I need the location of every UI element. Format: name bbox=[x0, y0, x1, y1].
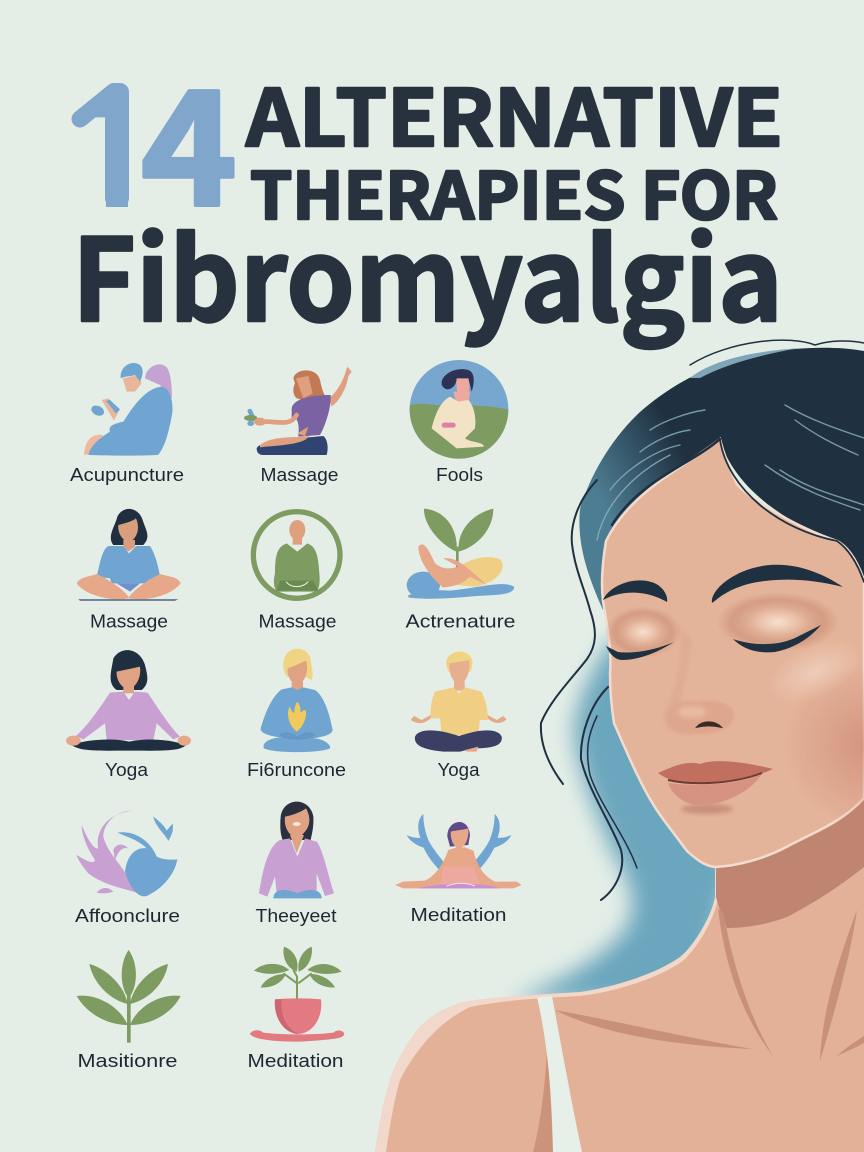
label: meditation bottom: Meditation bbox=[248, 1050, 344, 1071]
icon: acupuncture bbox=[84, 363, 172, 456]
icon: woman in circle bbox=[410, 360, 508, 459]
label: masitionre: Masitionre bbox=[78, 1050, 178, 1071]
hair strands bbox=[541, 340, 864, 900]
lip shadow bbox=[681, 804, 733, 814]
woman portrait bbox=[375, 340, 864, 1152]
top strap bbox=[537, 996, 582, 1152]
neck and shoulders bbox=[375, 798, 864, 1152]
arm shadow beside strap bbox=[533, 1050, 553, 1152]
row 1 icons (drawn at 3x, scaled down) bbox=[77, 358, 514, 601]
label: massage: Massage bbox=[260, 464, 338, 485]
left closed eye bbox=[606, 642, 674, 660]
label: acupuncture: Acupuncture bbox=[70, 464, 184, 485]
nose shading bbox=[663, 622, 692, 735]
icon: meditation with antlers bbox=[395, 814, 522, 888]
hair highlights bbox=[597, 405, 864, 540]
hair top sheen bbox=[690, 348, 800, 378]
number 14: 1 bbox=[74, 22, 158, 251]
right eyebrow bbox=[712, 565, 843, 603]
label: massage row 2 middle: Massage bbox=[258, 610, 336, 632]
icon: blonde figure yellow top bbox=[411, 651, 507, 752]
cheek blush bbox=[780, 660, 864, 830]
label: actrenature: Actrenature bbox=[406, 610, 516, 632]
label: affoonclure: Affoonclure bbox=[75, 905, 180, 926]
neck lines and collarbone bbox=[555, 908, 864, 1061]
number 14: 4 bbox=[141, 22, 237, 251]
icon: yoga woman lilac bbox=[66, 650, 191, 751]
right closed eye bbox=[733, 625, 821, 652]
neck shadow bbox=[716, 800, 864, 928]
icon: potted plant bbox=[250, 947, 344, 1042]
face bbox=[602, 439, 864, 867]
rows 3 to 5 icons (drawn at 3x, scaled down) bbox=[66, 649, 522, 1043]
title line: alternative: ALTERNATIVE bbox=[245, 57, 783, 169]
icon: blonde figure blue top bbox=[261, 649, 333, 752]
number 14 bbox=[70, 22, 237, 251]
label: fools: Fools bbox=[436, 464, 483, 485]
left eyelid bbox=[605, 606, 681, 658]
icon: reclining figure with sprout bbox=[407, 509, 514, 599]
title line: fibromyalgia: Fibromyalgia bbox=[72, 189, 783, 354]
label: yoga right: Yoga bbox=[438, 759, 480, 780]
shoulder highlight bbox=[375, 865, 718, 1152]
nostril bbox=[697, 722, 721, 727]
icon: green plant bbox=[77, 950, 181, 1043]
label: massage row 2 left: Massage bbox=[90, 610, 168, 632]
icon: massage woman with raised arm bbox=[244, 367, 352, 455]
icon: abstract swirl bbox=[77, 811, 177, 896]
label: meditation right: Meditation bbox=[410, 904, 506, 925]
icon: woman lilac top bbox=[259, 802, 334, 898]
right eyelid bbox=[716, 592, 840, 652]
nose tip bbox=[666, 701, 734, 734]
nose highlight bbox=[678, 706, 706, 718]
blue mist behind face bbox=[510, 640, 735, 1002]
icon: seated woman crossed legs bbox=[77, 509, 181, 601]
cheek highlight bbox=[759, 627, 864, 717]
label: theeyeet: Theeyeet bbox=[256, 905, 336, 926]
title bbox=[70, 22, 783, 354]
left eyebrow bbox=[603, 580, 667, 602]
lips bbox=[658, 761, 773, 805]
label: yoga left: Yoga bbox=[105, 759, 149, 780]
icon: man in green ring bbox=[253, 512, 340, 598]
title line: therapies for: THERAPIES FOR bbox=[250, 144, 778, 238]
label: fi6runcone: Fi6runcone bbox=[247, 759, 346, 780]
hair bbox=[579, 348, 864, 610]
